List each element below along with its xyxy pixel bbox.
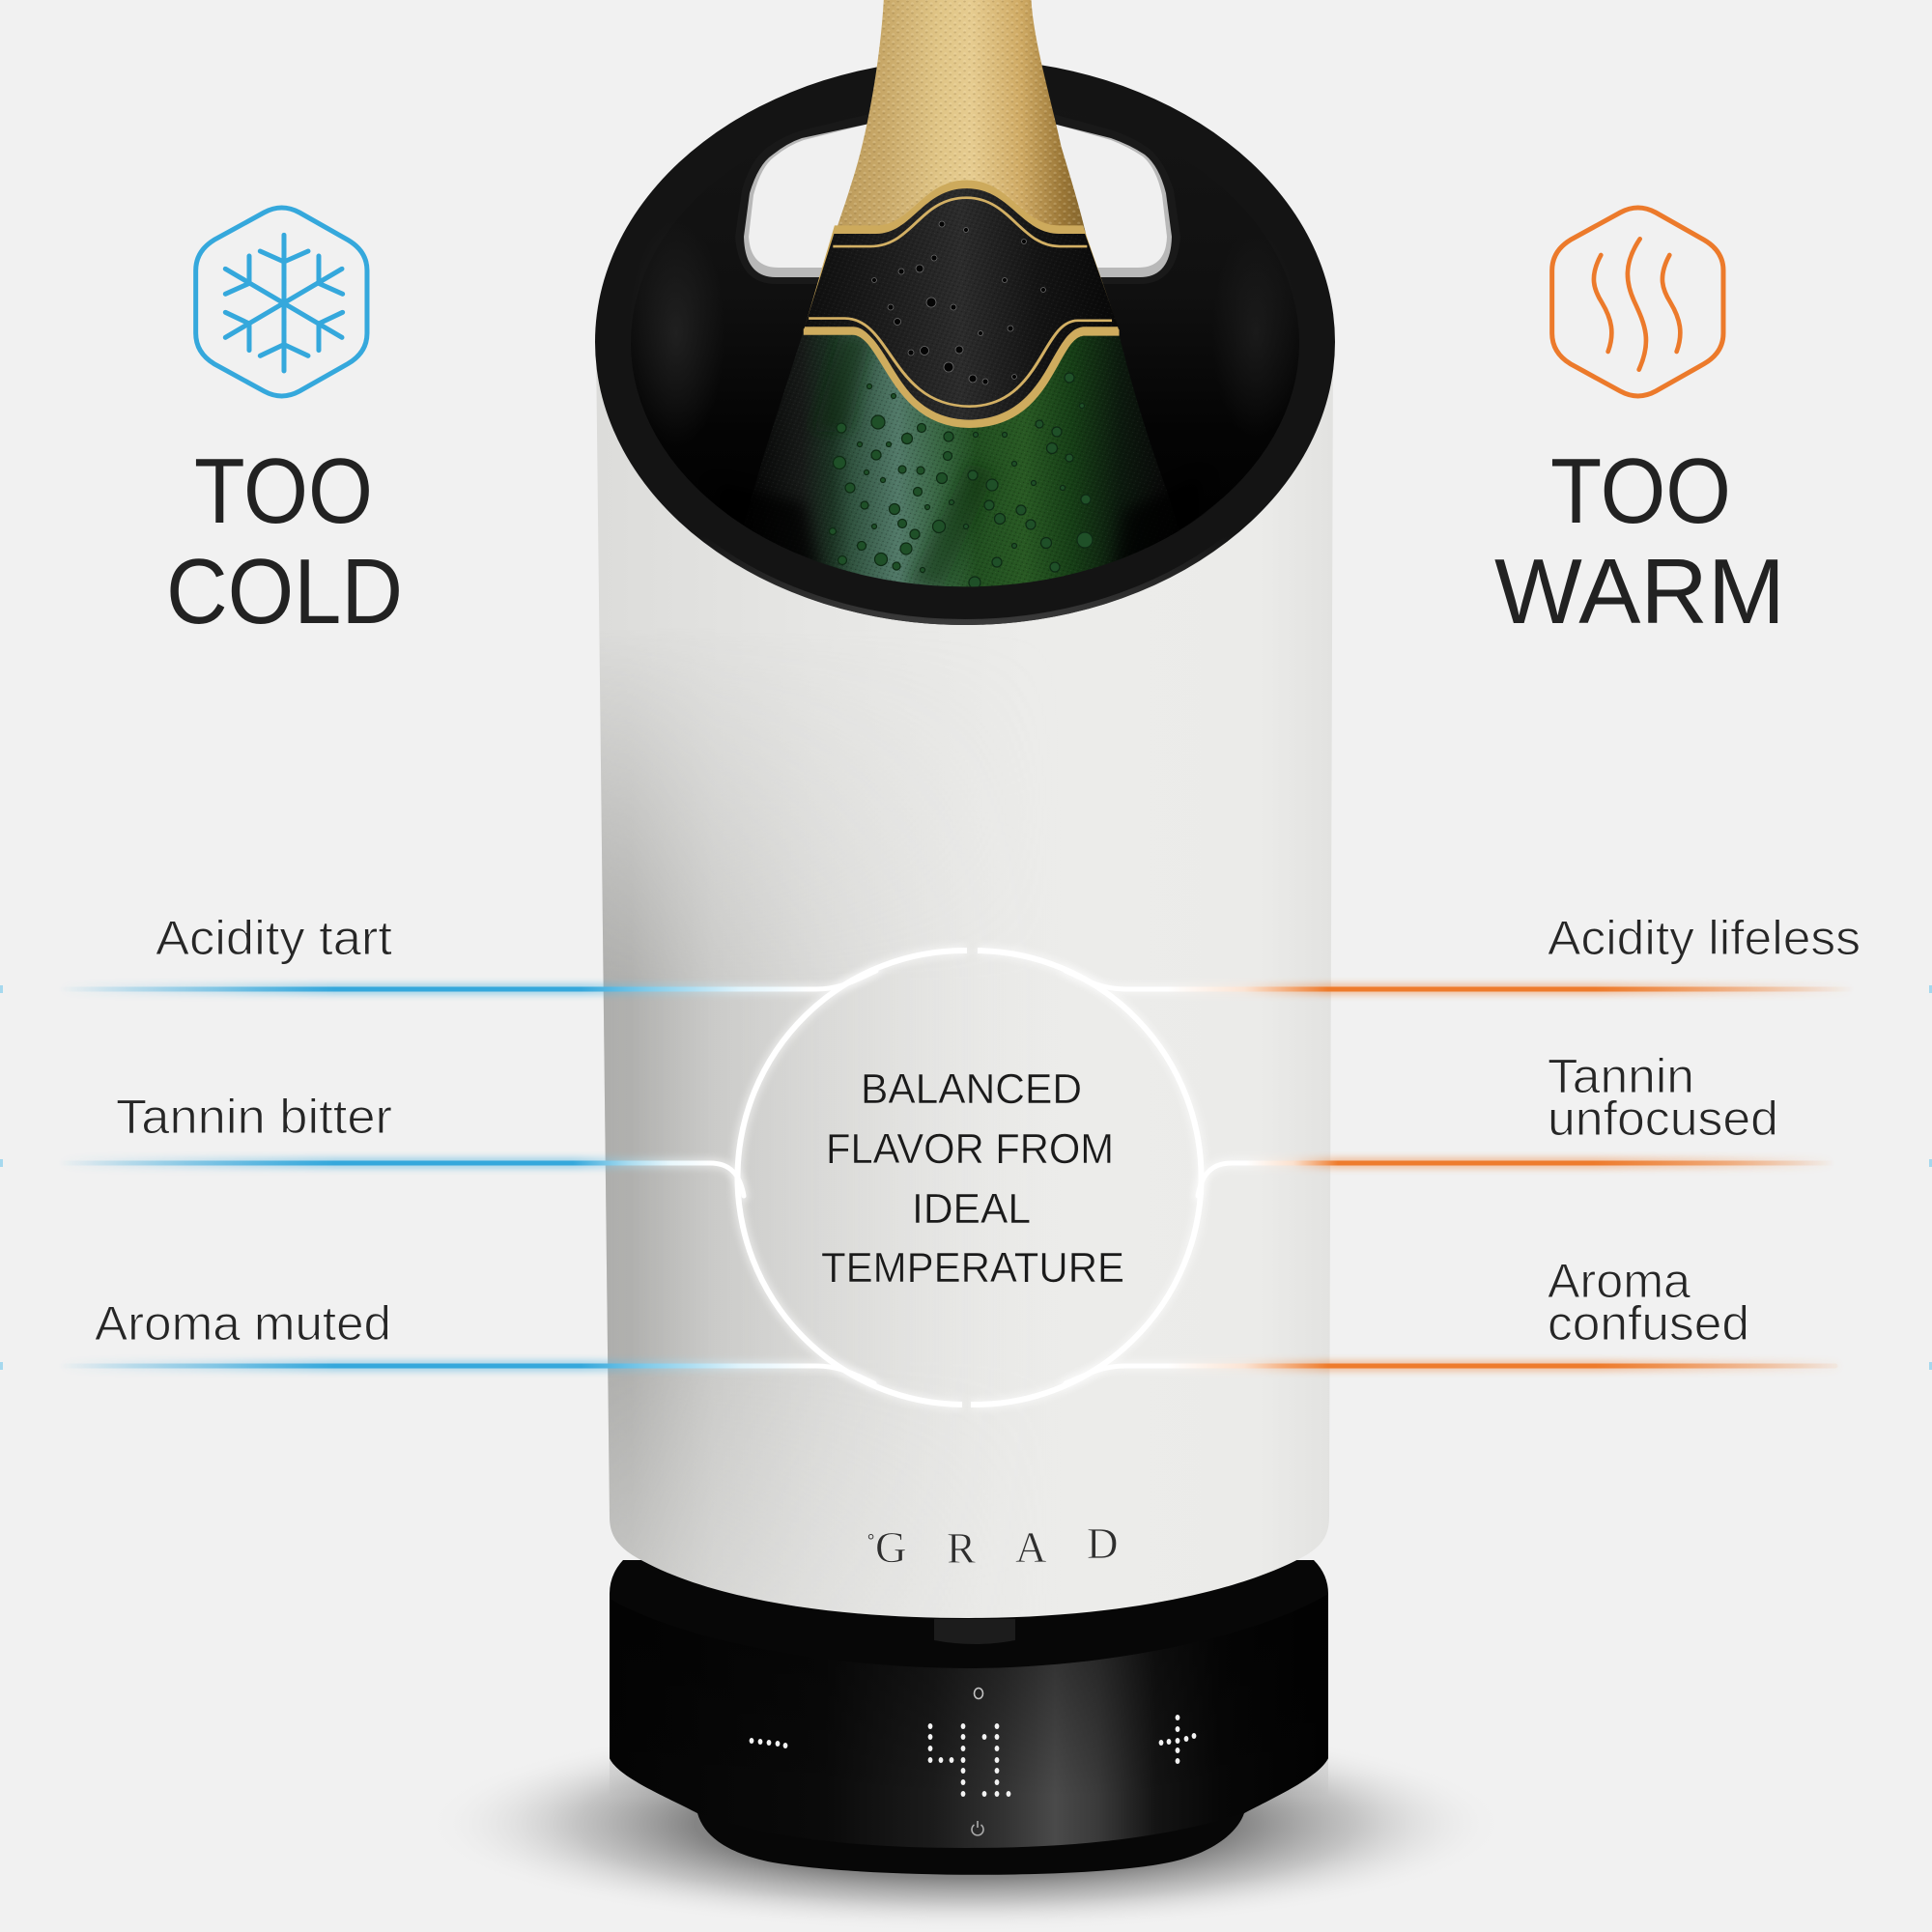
heading: too cold: TOO (194, 440, 373, 543)
black neck label (804, 180, 1120, 425)
brand logo: ° (867, 1530, 874, 1549)
product: wine cooler and bottle (595, 0, 1335, 1875)
connector lines: too warm (1065, 971, 1855, 1383)
labels: too cold: Aroma muted (95, 1296, 391, 1350)
heading: too warm: WARM (1494, 540, 1785, 643)
edge marks (0, 985, 1932, 1370)
rim and bowl (595, 59, 1335, 625)
connector lines: too cold (58, 971, 876, 1383)
center message: BALANCED (861, 1065, 1082, 1113)
labels: too warm: unfocused (1548, 1092, 1778, 1146)
champagne bottle (744, 0, 1201, 587)
labels: too cold: Acidity tart (156, 911, 392, 965)
heading: too warm: TOO (1550, 440, 1731, 543)
center message: FLAVOR FROM (826, 1125, 1114, 1173)
labels: too cold: Tannin bitter (116, 1090, 392, 1144)
heading: too cold: COLD (166, 540, 403, 643)
white cylinder body (596, 348, 1333, 1618)
heading: too cold (166, 440, 403, 643)
labels: too warm: Acidity lifeless (1548, 911, 1861, 965)
handle opening (735, 114, 1180, 284)
center message: IDEAL (912, 1185, 1031, 1233)
base unit (610, 1560, 1328, 1875)
center message (821, 1065, 1124, 1292)
callout ring (737, 951, 1202, 1405)
heading: too warm (1494, 440, 1785, 643)
gold foil neck (834, 0, 1087, 239)
green glass (744, 334, 1201, 587)
condensation droplets (829, 373, 1093, 588)
labels: too warm: confused (1548, 1296, 1749, 1350)
icon: snowflake (196, 208, 367, 396)
center message: TEMPERATURE (821, 1244, 1124, 1292)
labels: too warm: Aroma (1548, 1254, 1690, 1308)
labels: too warm (1548, 911, 1861, 1350)
label droplets (871, 221, 1045, 384)
labels: too cold (95, 911, 392, 1350)
floor shadow (425, 1716, 1507, 1932)
LED display (750, 1689, 1196, 1835)
brand logo: GRAD (875, 1520, 1119, 1573)
icon: heat waves (1552, 208, 1723, 396)
labels: too warm: Tannin (1548, 1049, 1694, 1103)
